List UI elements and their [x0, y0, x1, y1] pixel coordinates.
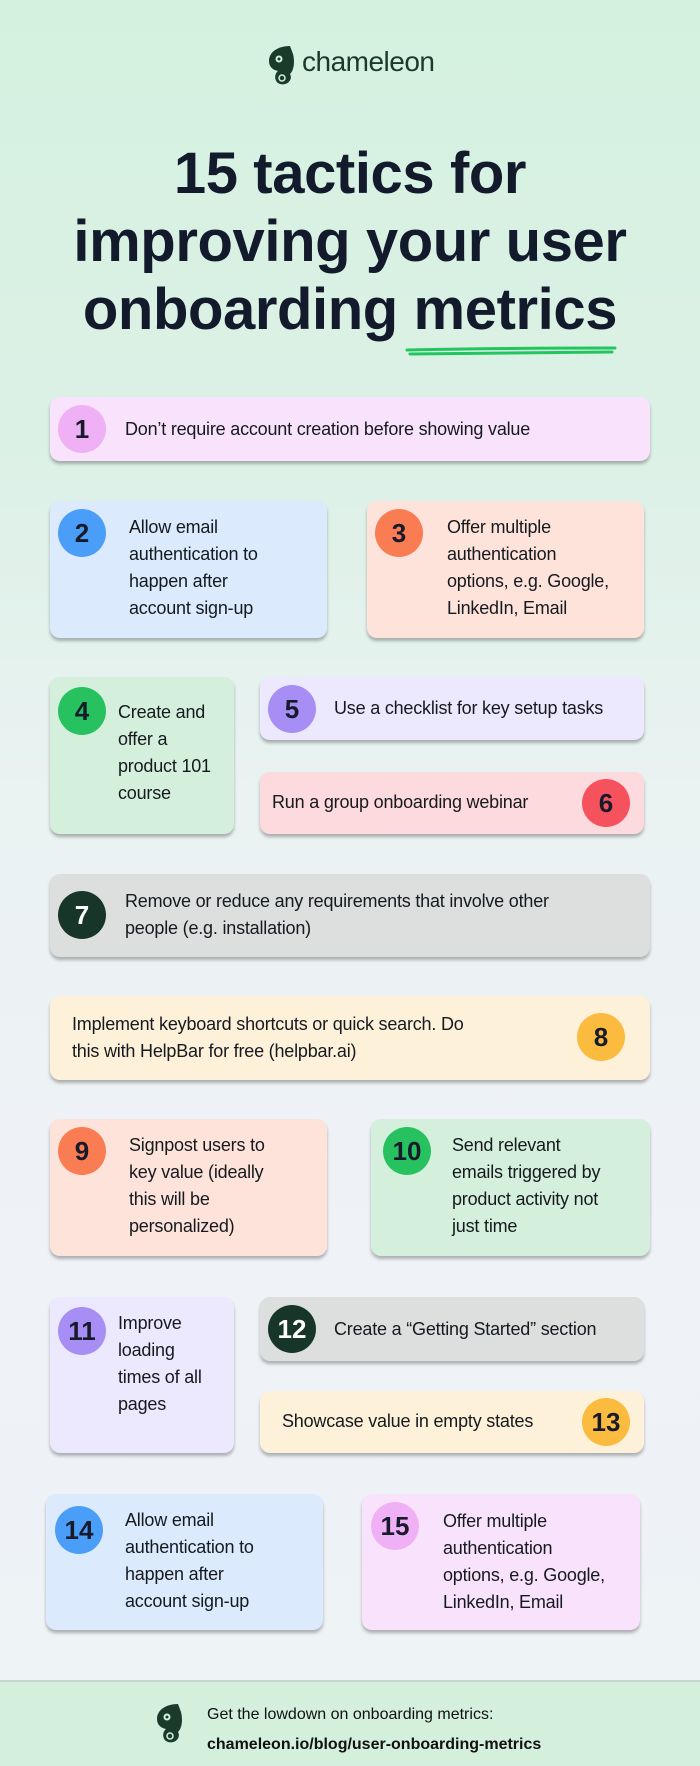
card 11: loading [118, 1340, 175, 1360]
card 5 [260, 677, 644, 740]
card 3: options, e.g. Google, [447, 571, 609, 591]
card 14: 14 [65, 1515, 93, 1545]
card 13 [260, 1391, 644, 1453]
card 2: account sign-up [129, 598, 253, 618]
card 15: authentication [443, 1538, 552, 1558]
card 2: authentication to [129, 544, 258, 564]
card 1 [50, 397, 650, 461]
card 11: Improve [118, 1313, 182, 1333]
card 3: LinkedIn, Email [447, 598, 567, 618]
card 4 [50, 677, 234, 834]
card 4: product 101 [118, 756, 211, 776]
card 7: 7 [75, 900, 89, 930]
card 7: people (e.g. installation) [125, 918, 311, 938]
card 8: this with HelpBar for free (helpbar.ai) [72, 1041, 356, 1061]
card 15: options, e.g. Google, [443, 1565, 605, 1585]
card 4: course [118, 783, 171, 803]
card 1: Don’t require account creation before showing value [125, 419, 530, 439]
card 8 [50, 996, 650, 1080]
card 11: 11 [68, 1316, 96, 1346]
logo: chameleon [302, 46, 434, 77]
card 14: Allow email [125, 1510, 214, 1530]
footer [0, 1680, 700, 1766]
card 2: 2 [75, 518, 89, 548]
card 10: product activity not [452, 1189, 598, 1209]
title [73, 141, 627, 342]
card 10: 10 [393, 1136, 421, 1166]
card 15 [362, 1494, 640, 1630]
card 11 [50, 1297, 234, 1453]
footer text: chameleon.io/blog/user-onboarding-metrics [207, 1736, 541, 1753]
card 12 [260, 1297, 644, 1361]
card 2 [50, 501, 327, 638]
card 6 [260, 772, 644, 834]
card 14 [46, 1494, 323, 1630]
card 4: 4 [75, 696, 89, 726]
card 6: 6 [599, 788, 613, 818]
card 15: Offer multiple [443, 1511, 547, 1531]
card 14: account sign-up [125, 1591, 249, 1611]
card 8: Implement keyboard shortcuts or quick search. Do [72, 1014, 464, 1034]
title: improving your user [73, 209, 627, 274]
card 6: Run a group onboarding webinar [272, 792, 528, 812]
card 1: 1 [75, 414, 89, 444]
card 9: personalized) [129, 1216, 234, 1236]
card 9: Signpost users to [129, 1135, 265, 1155]
title: 15 tactics for [174, 141, 526, 206]
card 8: 8 [594, 1022, 608, 1052]
card 15: 15 [381, 1511, 409, 1541]
card 11: times of all [118, 1367, 202, 1387]
card 13: 13 [592, 1407, 620, 1437]
underline [406, 346, 616, 356]
card 12: Create a “Getting Started” section [334, 1319, 596, 1339]
card 11: pages [118, 1394, 166, 1414]
card 14: happen after [125, 1564, 224, 1584]
card 10: emails triggered by [452, 1162, 600, 1182]
card 10: Send relevant [452, 1135, 560, 1155]
card 3: Offer multiple [447, 517, 551, 537]
card 10: just time [452, 1216, 517, 1236]
card 12: 12 [278, 1314, 306, 1344]
card 4: Create and [118, 702, 205, 722]
card 3 [367, 501, 644, 638]
card 10 [371, 1119, 650, 1256]
card 9: 9 [75, 1136, 89, 1166]
card 9 [50, 1119, 327, 1256]
title: onboarding metrics [83, 277, 617, 342]
card 2: happen after [129, 571, 228, 591]
card 7: Remove or reduce any requirements that involve other [125, 891, 549, 911]
card 4: offer a [118, 729, 167, 749]
card 5: Use a checklist for key setup tasks [334, 698, 603, 718]
card 13: Showcase value in empty states [282, 1411, 533, 1431]
footer text: Get the lowdown on onboarding metrics: [207, 1706, 493, 1723]
card 15: LinkedIn, Email [443, 1592, 563, 1612]
logo [269, 46, 434, 84]
card 2: Allow email [129, 517, 218, 537]
card 3: authentication [447, 544, 556, 564]
card 14: authentication to [125, 1537, 254, 1557]
card 9: this will be [129, 1189, 210, 1209]
card 3: 3 [392, 518, 406, 548]
card 5: 5 [285, 694, 299, 724]
card 7 [50, 874, 650, 957]
footer icon [157, 1704, 182, 1742]
footer text [207, 1706, 541, 1753]
card 9: key value (ideally [129, 1162, 263, 1182]
